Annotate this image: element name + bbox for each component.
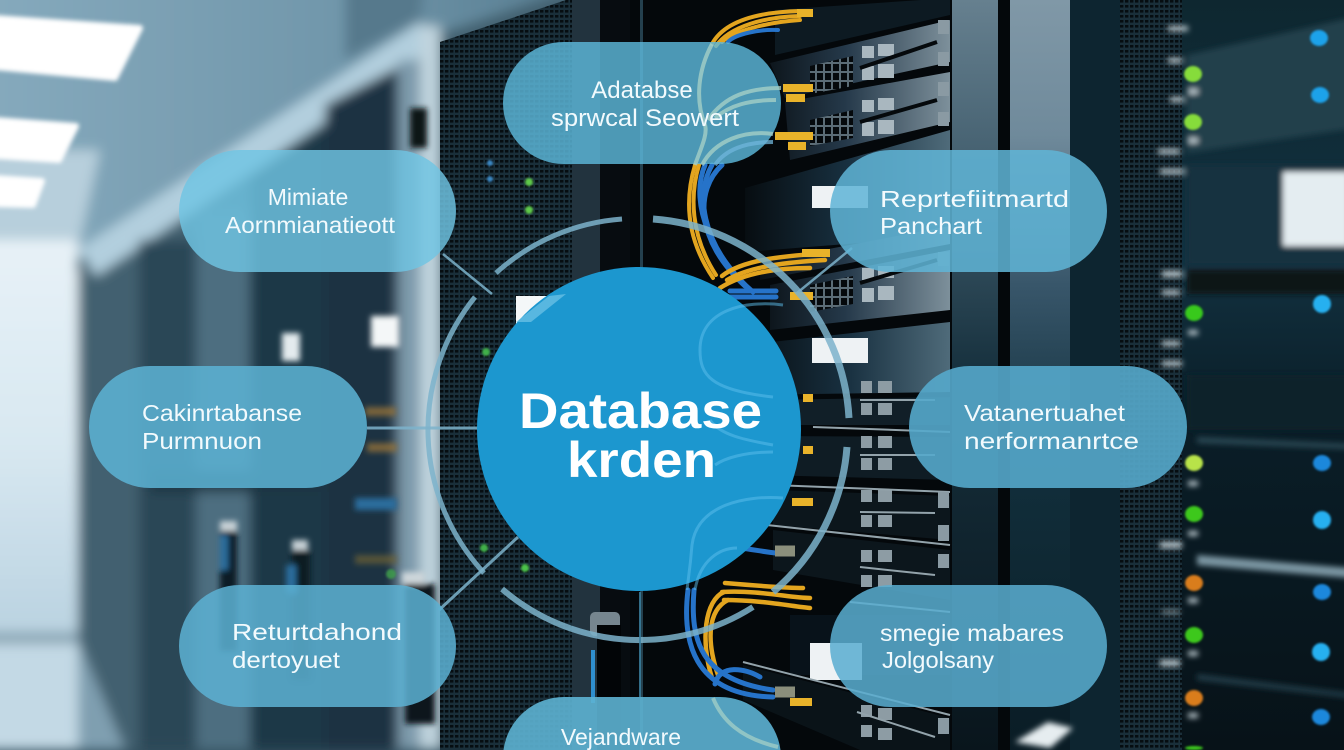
pill: middle right (909, 366, 1187, 488)
cables: lower yellow bundle (706, 583, 810, 678)
cables: connectors yellow (775, 13, 830, 702)
background: blurred wall and ceiling (0, 0, 600, 750)
background: blurred rack highlights (220, 108, 435, 724)
pill: upper left (179, 150, 456, 272)
pill: upper left: Aornmianatieott (225, 212, 396, 238)
cables: main blue riser (700, 165, 776, 297)
pill: middle left: Cakinrtabanse (142, 400, 302, 426)
background: rack labels (812, 186, 868, 208)
ring: upper left arc (496, 219, 622, 273)
ring and connector lines (367, 219, 852, 703)
pill: upper left: Mimiate (268, 184, 348, 210)
pill: lower right (830, 585, 1107, 707)
pill: top: Adatabse (591, 77, 693, 104)
pill: upper right (830, 150, 1107, 272)
background: central dark rack (572, 0, 1012, 750)
connector: bottom blue (591, 650, 595, 703)
pill: upper right: Panchart (880, 213, 983, 239)
label behind hub (516, 296, 550, 326)
connector: lower left (439, 537, 518, 610)
pill: lower left: Returtdahond (232, 619, 402, 645)
background: rack small indicator blocks (862, 44, 894, 302)
cables seen through hub (687, 304, 783, 590)
title: hub text: Database (519, 383, 762, 439)
pill: top: sprwcal Seowert (551, 105, 739, 132)
background: slate columns (952, 0, 998, 750)
background: rack port grids (810, 56, 853, 312)
background: right status lights (1184, 30, 1331, 750)
network cables (687, 11, 830, 702)
pill: bottom: Vejandware (561, 724, 681, 750)
connector: upper right (797, 248, 852, 293)
cables seen through top pill (695, 44, 781, 165)
ring: lower right arc (773, 447, 847, 592)
cables: upper-right yellow (720, 253, 825, 288)
cables: lower blue bundle (687, 548, 776, 697)
pill: bottom (504, 697, 780, 750)
background: status lights left rack (386, 160, 533, 579)
pill: lower left: dertoyuet (232, 647, 341, 673)
pill: lower right: smegie mabares (880, 620, 1064, 646)
pill: middle right: nerformanrtce (964, 428, 1139, 454)
connector: upper left (443, 254, 492, 294)
pill: lower left (179, 585, 456, 707)
cables: top blue bundle (728, 30, 778, 42)
pill: middle left: Purmnuon (142, 428, 262, 454)
ring: bottom arc (502, 589, 753, 640)
connector: bottom centre (639, 592, 641, 697)
ring: upper right arc (653, 219, 849, 418)
background: ceiling lights (0, 18, 140, 205)
pill: middle left (89, 366, 367, 488)
cables: top yellow bundle (712, 11, 800, 46)
background: rack server units (743, 0, 950, 750)
pill: upper right: Reprtefiitmartd (880, 186, 1069, 212)
pill: lower right: Jolgolsany (882, 647, 995, 673)
background: rack rails (743, 400, 950, 737)
background: right mesh and blurred rack (1070, 0, 1120, 750)
ring: left arc (428, 297, 484, 573)
background: rack mesh (440, 0, 572, 750)
pill: middle right: Vatanertuahet (964, 400, 1126, 426)
background: rack handles (938, 20, 949, 734)
central hub circle (477, 267, 801, 591)
pill: top (503, 42, 781, 165)
cables: connectors grey (775, 551, 795, 692)
central hub circle: krden (567, 432, 716, 488)
cables: main yellow riser (689, 165, 716, 278)
connector: left (367, 426, 480, 430)
